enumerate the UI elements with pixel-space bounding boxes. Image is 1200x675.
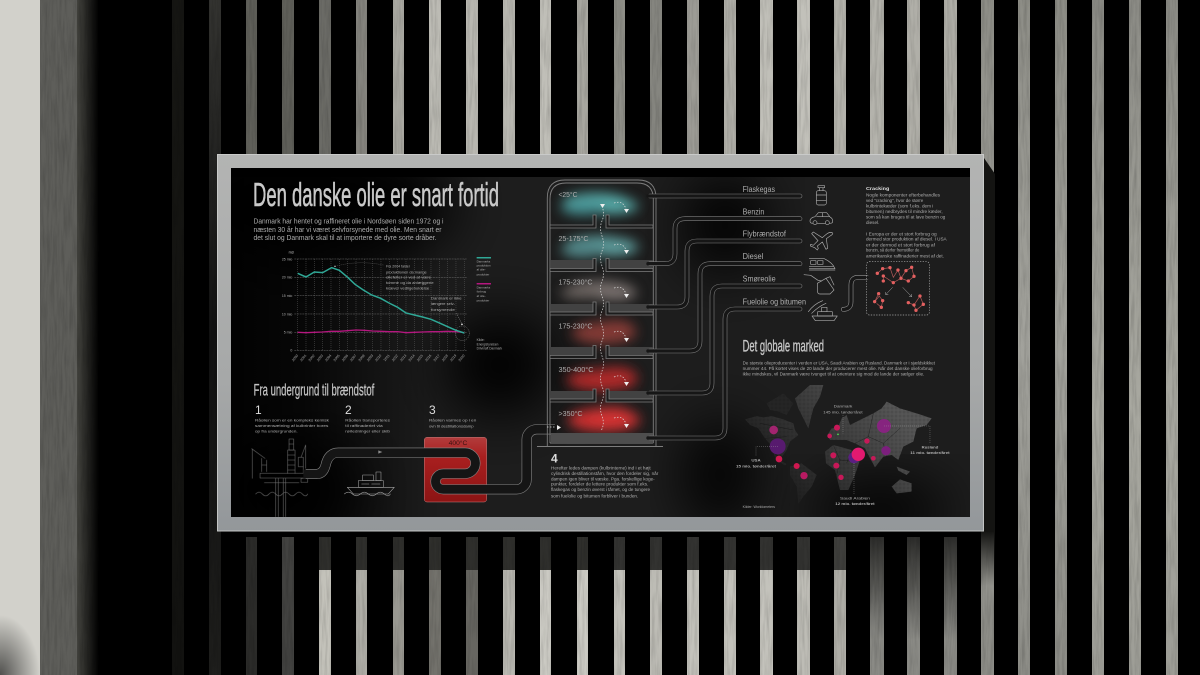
step 1 text: 1 [255, 403, 262, 417]
background: vertical slats below the poster [246, 537, 957, 675]
furnace: red box: 400°C [449, 439, 467, 447]
step 4 text: Herefter ledes dampen (kulbrinterne) ind i et højt [551, 466, 651, 471]
chart source: Energistyrelsen [477, 342, 499, 346]
product labels [743, 185, 806, 307]
column temperature labels [558, 190, 594, 418]
cracking text: diesel. [866, 220, 879, 225]
map labels: 145 mio. tønder/året [823, 409, 864, 414]
outlet pipes from column to products [648, 196, 800, 438]
step 2 text: 2 [345, 403, 352, 417]
line chart: Danish oil production and consumption [282, 251, 502, 362]
cracking text: kulbrintekæder (som f.eks. dem i [866, 203, 933, 208]
section heading: Det globale marked [743, 337, 824, 356]
cracking text: dermed stor produktion af diesel. I USA [866, 237, 947, 242]
icon: oil can [804, 275, 834, 294]
step 4 text: dampen igen bliver til væske. Pga. forskellige koge- [551, 476, 655, 481]
annotation: falling production: kræver vedligeholdelse [386, 286, 429, 290]
vapour arrowheads [557, 204, 629, 430]
step 3 text [429, 403, 476, 428]
x axis labels: 2012 [391, 354, 399, 362]
section text: ikke mindskes, vil Danmark være tvunget til at orientere sig mod de lande der sælger olie. [743, 371, 924, 376]
map labels: 15 mio. tønder/året [736, 464, 777, 469]
intro text: det slut og Danmark skal til at importere de dyre sorte dråber. [254, 234, 437, 242]
column temperature labels: 350-400°C [558, 365, 594, 374]
y axis labels [282, 251, 294, 353]
step 1 text: Råolien som er en kompleks kemisk [255, 417, 329, 422]
column temperature labels: >350°C [558, 409, 583, 418]
map source: Kilder: Worldometers [743, 505, 775, 509]
x axis labels: 2019 [449, 354, 457, 362]
annotation: no longer self-sufficient [431, 296, 469, 341]
cracking text: som så kan bruges til at lave benzin og [866, 215, 946, 220]
chart source: Kilde: [477, 338, 485, 342]
legend: produkter [477, 273, 489, 277]
step 1 text [255, 403, 329, 434]
icon: gas bottle [816, 186, 826, 205]
product labels: Benzin [743, 207, 764, 216]
distillation column [537, 180, 663, 446]
x axis labels: 2014 [408, 354, 416, 362]
step 2 text: til raffinaderiet via [345, 423, 384, 428]
chart grid [294, 259, 467, 350]
x axis labels: 2009 [366, 354, 374, 362]
product labels: Smøreolie [743, 275, 776, 284]
x axis labels: 2008 [358, 354, 366, 362]
y axis labels: m3 [289, 251, 294, 255]
icon: airplane [810, 232, 833, 250]
step 2 text [345, 403, 391, 434]
map labels [736, 404, 950, 506]
step 2 text: Råolien transporteres [345, 417, 390, 422]
map labels: USA [751, 458, 761, 463]
x axis labels: 2004 [324, 354, 332, 362]
step 3 text: Råolien varmes op i en [429, 418, 476, 423]
legend: Danmarks [477, 260, 491, 264]
product labels: Flybrændstof [743, 230, 787, 239]
section text [743, 360, 936, 376]
step 4 text: som fuelolie og bitumen forbliver i bunden. [551, 493, 638, 498]
step 4 text [551, 452, 659, 498]
x axis labels: 2005 [333, 354, 341, 362]
annotation: no longer self-sufficient: Danmark er ikke [431, 296, 462, 300]
step 4 text: punkter, fordeler de lettere produkter som f.eks. [551, 482, 648, 487]
icon: ship with smoke [808, 301, 837, 321]
column temperature labels: 175-230°C [558, 322, 593, 330]
title: Den danske olie er snart fortid [253, 176, 499, 213]
products, icons and cracking [743, 185, 947, 321]
annotation: falling production: produktionen da mange [386, 270, 427, 274]
legend: af olie- [477, 294, 486, 298]
annotation: falling production: tomme og da anlæggene [386, 281, 434, 285]
legend: forbrug [477, 290, 486, 294]
intro text: næsten 30 år har vi været selvforsynede med olie. Men snart er [254, 226, 442, 234]
icon: tanker ship [344, 472, 394, 496]
x axis labels: 2000 [291, 354, 299, 362]
consumption line [298, 330, 464, 333]
pipe from platform through furnace to the column [303, 429, 556, 489]
x axis labels: 2017 [433, 354, 441, 362]
section heading: Fra undergrund til brændstof [254, 380, 375, 399]
furnace: red box [424, 437, 487, 502]
annotation: no longer self-sufficient: længere selv- [431, 302, 455, 306]
column temperature labels: <25°C [558, 190, 578, 199]
product labels: Flaskegas [743, 185, 775, 194]
legend: produktion [477, 264, 491, 268]
y axis labels: 15 mio [282, 294, 292, 298]
icon: car [810, 213, 833, 225]
intro text: Danmark har hentet og raffineret olie i Nordsøen siden 1972 og i [254, 218, 444, 226]
x axis labels: 2016 [424, 354, 432, 362]
step 1 text: op fra undergrunden. [255, 429, 298, 434]
molecule diagram [867, 262, 929, 315]
annotation: no longer self-sufficient: forsynende [431, 308, 455, 312]
section: global market [736, 337, 950, 509]
cracking text: benzin, så derfor fremstiller de [866, 248, 920, 253]
step 4 text: 4 [551, 452, 558, 466]
product labels: Diesel [743, 252, 764, 261]
x axis labels: 2013 [399, 354, 407, 362]
map leader lines [756, 415, 930, 495]
production line [298, 268, 464, 333]
column temperature labels: 25-175°C [558, 234, 589, 243]
y axis labels: 5 mio [284, 331, 292, 335]
chart source [477, 338, 502, 351]
section: from underground to fuel [252, 380, 556, 517]
legend [477, 257, 491, 303]
map labels: Rusland [922, 444, 939, 449]
map labels: 11 mio. tønder/året [910, 450, 950, 455]
column liquid levels [551, 260, 653, 443]
rising vapour path [547, 202, 626, 431]
x axis labels: 2003 [316, 354, 324, 362]
column clouds [560, 193, 640, 432]
step 4 text: flaskegas og benzin øverst i tårnet, og de tungere [551, 487, 651, 492]
annotation: falling production: oliefelter er ved at være [386, 276, 431, 280]
step 3 text: 3 [429, 403, 436, 417]
legend: produkter [477, 299, 489, 303]
annotation: falling production: Fra 2004 falder [386, 265, 411, 269]
step 2 text: rørledninger eller skib [345, 429, 391, 434]
x axis labels: 2006 [341, 354, 349, 362]
y axis labels: 10 mio [282, 312, 292, 316]
icon: train [809, 259, 835, 270]
poster panel with lighting [231, 168, 970, 517]
x axis labels: 2007 [349, 354, 357, 362]
x axis labels: 2002 [308, 354, 316, 362]
y axis labels: 20 mio [282, 276, 292, 280]
x axis labels: 2010 [374, 354, 382, 362]
section text: De største olieproducenter i verden er USA, Saudi Arabien og Rusland. Danmark er i sjældskikket [743, 360, 936, 365]
legend: af olie- [477, 268, 486, 272]
cracking text: er der dermod et stort forbrug af [866, 242, 936, 247]
map labels: Danmark [834, 404, 852, 409]
map labels: Saudi Arabien [840, 495, 870, 500]
x axis labels [291, 354, 466, 362]
chart source: Drivkraft Danmark [477, 347, 502, 351]
step 4 text: cylindrisk destillationstårn, hvor den fordeler sig, når [551, 471, 659, 476]
poster frame [217, 154, 995, 586]
map bubbles [769, 419, 891, 480]
y axis labels: 25 mio [282, 257, 292, 261]
cracking text: amerikanske raffinaderier mest af det. [866, 253, 944, 258]
section text: nummer 44. På kortet vises de 20 lande der producerer mest olie. Når det danske olieforbrug [743, 366, 933, 371]
step 3 text: ovn til destillationsdamp [429, 423, 474, 428]
icon: oil platform [252, 439, 308, 517]
cracking text: ved "cracking", hvor de større [866, 198, 924, 203]
cracking text: Cracking [866, 186, 889, 191]
x axis labels: 2015 [416, 354, 424, 362]
step 1 text: sammensætning af kulbrinter bores [255, 423, 328, 428]
column temperature labels: 175-230°C [558, 278, 593, 286]
world map [745, 385, 932, 504]
legend: Danmarks [477, 285, 491, 289]
cracking feed pipe [843, 277, 867, 309]
x axis labels: 2011 [383, 354, 391, 362]
x axis labels: 2001 [299, 354, 307, 362]
column trays [550, 215, 653, 402]
cracking text: bitumen) nedbrydes til mindre kæder, [866, 209, 943, 214]
annotation: falling production [334, 263, 434, 290]
y axis labels: 0 [290, 349, 292, 353]
x axis labels: 2020 [458, 354, 466, 362]
column shell [537, 180, 663, 446]
cracking text: I Europa er der et stort forbrug og [866, 231, 937, 236]
map labels: 12 mio. tønder/året [835, 501, 875, 506]
product labels: Fuelolie og bitumen [743, 298, 806, 307]
x axis labels: 2018 [441, 354, 449, 362]
cracking text [866, 186, 947, 258]
intro text [254, 218, 444, 242]
cracking text: Nogle komponenter efterbehandles [866, 192, 940, 197]
